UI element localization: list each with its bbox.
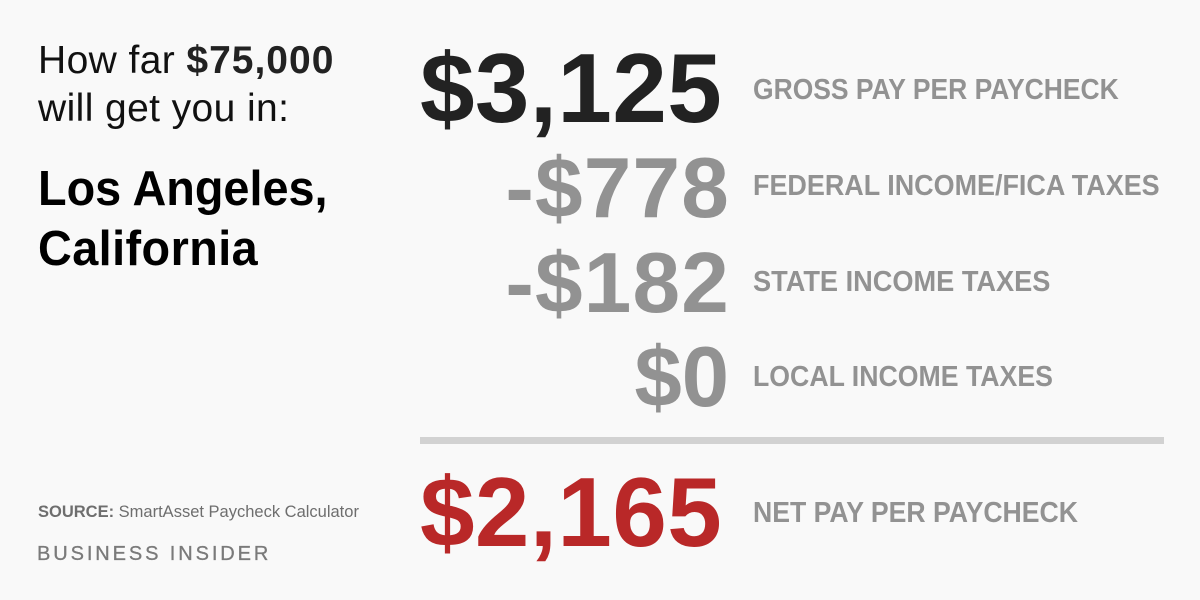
source note: SOURCE: SmartAsset Paycheck Calculator bbox=[38, 503, 359, 521]
net pay label: NET PAY PER PAYCHECK bbox=[753, 497, 1078, 529]
city heading: California bbox=[38, 222, 258, 276]
city heading: Los Angeles, bbox=[38, 162, 327, 216]
divider rule bbox=[420, 437, 1164, 444]
city heading bbox=[38, 162, 327, 276]
Business Insider logo: BUSINESS INSIDER bbox=[37, 543, 271, 565]
gross pay amount: $3,125 bbox=[420, 33, 722, 143]
intro heading: How far $75,000 bbox=[38, 38, 334, 82]
net pay amount: $2,165 bbox=[420, 457, 722, 567]
gross pay label: GROSS PAY PER PAYCHECK bbox=[753, 74, 1119, 106]
intro heading bbox=[38, 38, 334, 130]
federal tax amount: -$778 bbox=[505, 141, 730, 236]
state tax amount: -$182 bbox=[505, 236, 730, 331]
intro heading: will get you in: bbox=[38, 86, 289, 130]
federal tax label: FEDERAL INCOME/FICA TAXES bbox=[753, 170, 1160, 202]
state tax label: STATE INCOME TAXES bbox=[753, 266, 1050, 298]
local tax label: LOCAL INCOME TAXES bbox=[753, 361, 1053, 393]
local tax amount: $0 bbox=[634, 330, 729, 425]
